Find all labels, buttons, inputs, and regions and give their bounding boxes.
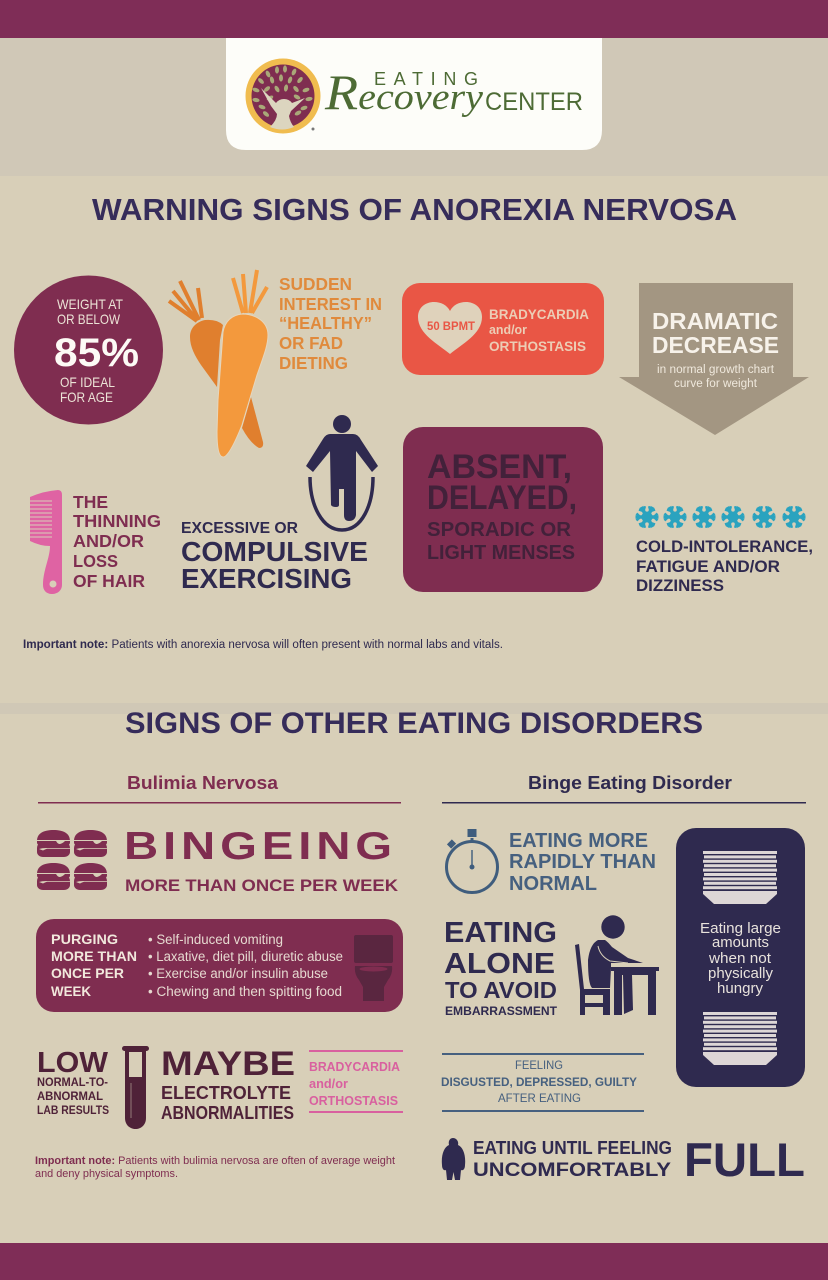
text: eating rapidly: RAPIDLY THAN: [509, 850, 656, 873]
note: bulimia: and deny physical symptoms.: [35, 1168, 178, 1180]
panel: purging: PURGING: [51, 931, 118, 947]
callout: feeling disgusted: FEELING: [515, 1058, 563, 1072]
note: bulimia: Important note: Patients with bulimia nervosa are often of average weight: [35, 1155, 395, 1167]
panel: purging: MORE THAN: [51, 948, 137, 964]
weight circle: [14, 276, 163, 424]
text: compulsive exercising: EXCESSIVE OR: [181, 520, 298, 537]
text: cold intolerance: FATIGUE AND/OR: [636, 558, 780, 576]
logo panel: [226, 38, 602, 150]
arrow: dramatic decrease: in normal growth chart: [657, 364, 775, 376]
text: healthy dieting: [279, 274, 382, 373]
text: hair: AND/OR: [73, 531, 144, 551]
text: maybe electrolyte: ABNORMALITIES: [161, 1103, 294, 1123]
panel: eating large amounts: Eating large: [700, 921, 781, 937]
text: eating rapidly: [509, 829, 656, 895]
text: low lab results: LOW: [37, 1047, 109, 1079]
text: healthy dieting: OR FAD: [279, 333, 343, 353]
icon: plates top: [703, 851, 777, 904]
arrow: dramatic decrease: DRAMATIC: [652, 308, 778, 334]
logo emblem: [246, 58, 320, 134]
icon: plates bottom: [703, 1012, 777, 1065]
icon: heart: [418, 302, 482, 354]
icon: comb: [30, 490, 62, 594]
text: bingeing: MORE THAN ONCE PER WEEK: [125, 876, 399, 895]
text: bingeing: BINGEING: [124, 825, 397, 868]
callout: bradycardia pink: [309, 1050, 403, 1113]
text: eating until full: UNCOMFORTABLY: [473, 1160, 671, 1181]
text: low lab results: [37, 1047, 109, 1117]
text: healthy dieting: “HEALTHY”: [279, 313, 372, 333]
logo wordmark: EATING: [374, 69, 478, 89]
text: eating alone: EATING: [444, 917, 557, 949]
text: compulsive exercising: EXERCISING: [181, 563, 352, 594]
panel: purging: [36, 919, 403, 1012]
arrow: dramatic decrease: curve for weight: [674, 378, 758, 390]
top bar: [0, 0, 828, 38]
panel: bradycardia: BRADYCARDIA: [489, 306, 589, 322]
text: hair: [73, 492, 161, 591]
text: eating alone: TO AVOID: [445, 977, 557, 1003]
text: healthy dieting: SUDDEN: [279, 274, 352, 294]
text: healthy dieting: DIETING: [279, 353, 348, 373]
panel: menses: LIGHT MENSES: [427, 542, 575, 564]
bottom bar: [0, 1243, 828, 1280]
text: cold intolerance: COLD-INTOLERANCE,: [636, 538, 813, 556]
panel: eating large amounts: hungry: [717, 981, 764, 997]
weight circle: FOR AGE: [60, 389, 113, 405]
text: maybe electrolyte: MAYBE: [161, 1045, 295, 1083]
weight circle: 85%: [54, 331, 139, 375]
text: eating rapidly: EATING MORE: [509, 829, 648, 852]
weight circle: OR BELOW: [57, 311, 121, 327]
title: other disorders: SIGNS OF OTHER EATING DISORDERS: [125, 707, 703, 740]
panel: eating large amounts: physically: [708, 966, 774, 982]
text: eating alone: [444, 917, 558, 1018]
arrow: dramatic decrease: [619, 283, 809, 435]
note: bulimia: [35, 1155, 395, 1180]
panel: purging: ONCE PER: [51, 965, 124, 981]
callout: bradycardia pink: ORTHOSTASIS: [309, 1093, 398, 1108]
icon: carrots: [169, 270, 268, 457]
panel: menses: [403, 427, 603, 592]
callout: bradycardia pink: and/or: [309, 1076, 348, 1091]
arrow: dramatic decrease: DECREASE: [652, 332, 779, 358]
logo wordmark: Recovery: [324, 64, 484, 120]
heading: binge eating: Binge Eating Disorder: [528, 773, 732, 793]
text: eating until full: [473, 1133, 805, 1186]
callout: feeling disgusted: DISGUSTED, DEPRESSED, GUILTY: [441, 1075, 637, 1089]
panel: purging: • Chewing and then spitting food: [148, 984, 342, 999]
icon: jump rope figure: [306, 415, 378, 530]
icon: toilet: [354, 935, 393, 1001]
note: anorexia: Important note: Patients with anorexia nervosa will often present with normal labs and vitals.: [23, 639, 503, 651]
panel: bradycardia: [402, 283, 604, 375]
panel: eating large amounts: when not: [708, 951, 771, 967]
callout: bradycardia pink: BRADYCARDIA: [309, 1059, 401, 1074]
icon: test tube: [122, 1046, 149, 1129]
text: maybe electrolyte: [161, 1045, 295, 1123]
panel: purging: • Self-induced vomiting: [148, 932, 283, 947]
text: hair: THINNING: [73, 511, 161, 531]
callout: feeling disgusted: AFTER EATING: [498, 1091, 581, 1105]
text: hair: LOSS: [73, 551, 118, 571]
panel: purging: WEEK: [51, 983, 91, 999]
weight circle: WEIGHT AT: [57, 296, 123, 312]
panel: eating large amounts: amounts: [712, 935, 769, 951]
heading: bulimia: Bulimia Nervosa: [127, 773, 279, 793]
icon: full figure: [442, 1138, 465, 1180]
text: maybe electrolyte: ELECTROLYTE: [161, 1083, 291, 1103]
panel: purging: • Laxative, diet pill, diuretic abuse: [148, 949, 343, 964]
text: eating until full: EATING UNTIL FEELING: [473, 1138, 672, 1158]
text: eating alone: EMBARRASSMENT: [445, 1004, 558, 1018]
panel: bradycardia: and/or: [489, 322, 527, 337]
panel: purging: • Exercise and/or insulin abuse: [148, 966, 328, 981]
icon: person at table: [575, 915, 659, 1015]
section divider band: [0, 703, 828, 714]
text: low lab results: NORMAL-TO-: [37, 1075, 108, 1089]
text: compulsive exercising: COMPULSIVE: [181, 536, 368, 567]
panel: menses: ABSENT,: [427, 448, 572, 486]
text: eating alone: ALONE: [444, 948, 555, 980]
panel: bradycardia: ORTHOSTASIS: [489, 338, 586, 354]
icon: snowflakes: [636, 506, 806, 528]
text: eating until full: FULL: [684, 1133, 805, 1186]
text: bingeing: [124, 825, 399, 895]
text: healthy dieting: INTEREST IN: [279, 294, 382, 314]
panel: menses: SPORADIC OR: [427, 519, 572, 541]
icon: stopwatch: [446, 829, 498, 892]
text: low lab results: LAB RESULTS: [37, 1103, 109, 1117]
panel: menses: DELAYED,: [427, 479, 577, 517]
text: eating rapidly: NORMAL: [509, 872, 597, 895]
title: anorexia: WARNING SIGNS OF ANOREXIA NERVOSA: [92, 193, 737, 227]
icon: burgers: [37, 830, 107, 890]
text: hair: THE: [73, 492, 108, 512]
text: compulsive exercising: [181, 520, 368, 594]
text: cold intolerance: [636, 538, 813, 595]
callout: feeling disgusted: [441, 1053, 644, 1112]
text: cold intolerance: DIZZINESS: [636, 577, 724, 595]
logo wordmark: CENTER: [485, 88, 583, 116]
text: hair: OF HAIR: [73, 571, 145, 591]
text: low lab results: ABNORMAL: [37, 1089, 103, 1103]
panel: eating large amounts: [676, 828, 805, 1087]
logo wordmark: [324, 64, 583, 120]
weight circle: OF IDEAL: [60, 374, 115, 390]
panel: bradycardia: 50 BPMT: [427, 321, 475, 333]
header band: [0, 38, 828, 176]
